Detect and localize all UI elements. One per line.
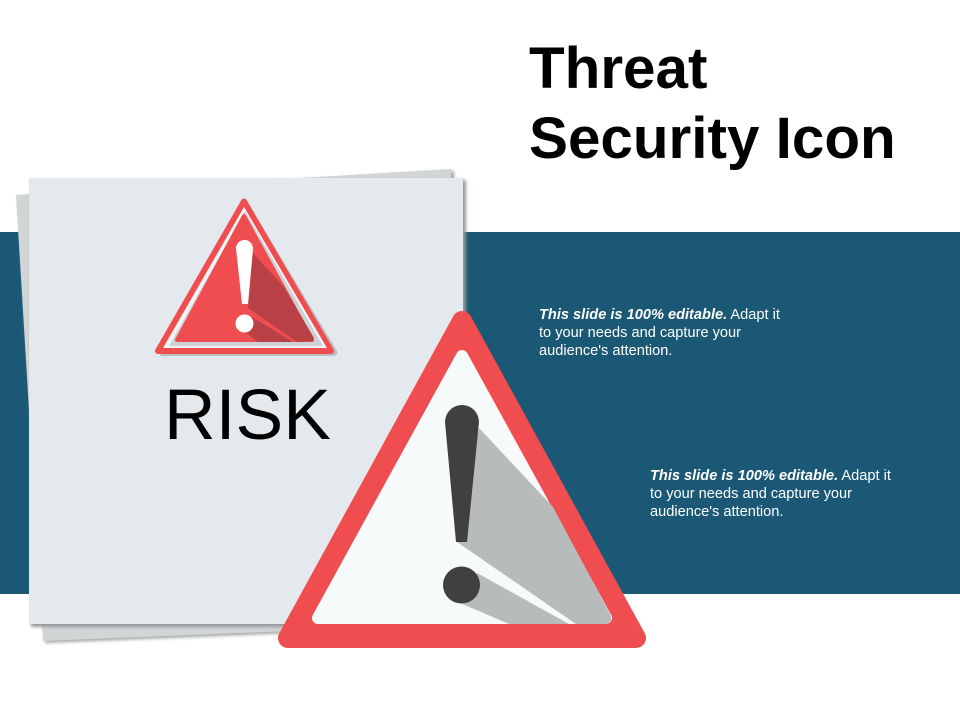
background band (0, 232, 960, 594)
title second line: Security Icon (529, 106, 896, 171)
text block 2: audience's attention. (650, 504, 783, 520)
icon: large warning triangle (288, 321, 636, 638)
text block 1: audience's attention. (539, 343, 672, 359)
small exclamation shadow (248, 253, 314, 342)
small triangle shadow (160, 201, 337, 356)
panel: stacked paper (16, 169, 466, 643)
small exclamation mark (236, 240, 253, 304)
back sheet shadow (18, 171, 466, 643)
front sheet shadow (31, 180, 466, 627)
large triangle outer (288, 321, 636, 638)
small exclamation dot (236, 314, 254, 332)
text block 1: This slide is 100% editable. (539, 307, 727, 323)
large exclamation mark (445, 405, 479, 542)
small triangle outer (158, 202, 331, 351)
large triangle inner (318, 356, 606, 618)
small triangle inner band (163, 207, 327, 348)
title: Threat (529, 36, 707, 101)
text block 1: Adapt it (727, 307, 780, 323)
large dot shadow (460, 573, 569, 624)
text block 1: to your needs and capture your (539, 325, 741, 341)
text block 2: to your needs and capture your (650, 486, 852, 502)
RISK label: RISK (164, 375, 331, 455)
back sheet (16, 169, 463, 641)
large exclamation dot (443, 566, 480, 604)
small triangle red field (177, 216, 312, 340)
front sheet (29, 178, 463, 624)
icon: small warning triangle (158, 201, 337, 356)
large exclamation shadow (457, 428, 611, 624)
text block 2: Adapt it (838, 468, 891, 484)
small triangle grey band (169, 211, 323, 346)
small dot shadow (245, 317, 293, 342)
text block 2: This slide is 100% editable. (650, 468, 838, 484)
